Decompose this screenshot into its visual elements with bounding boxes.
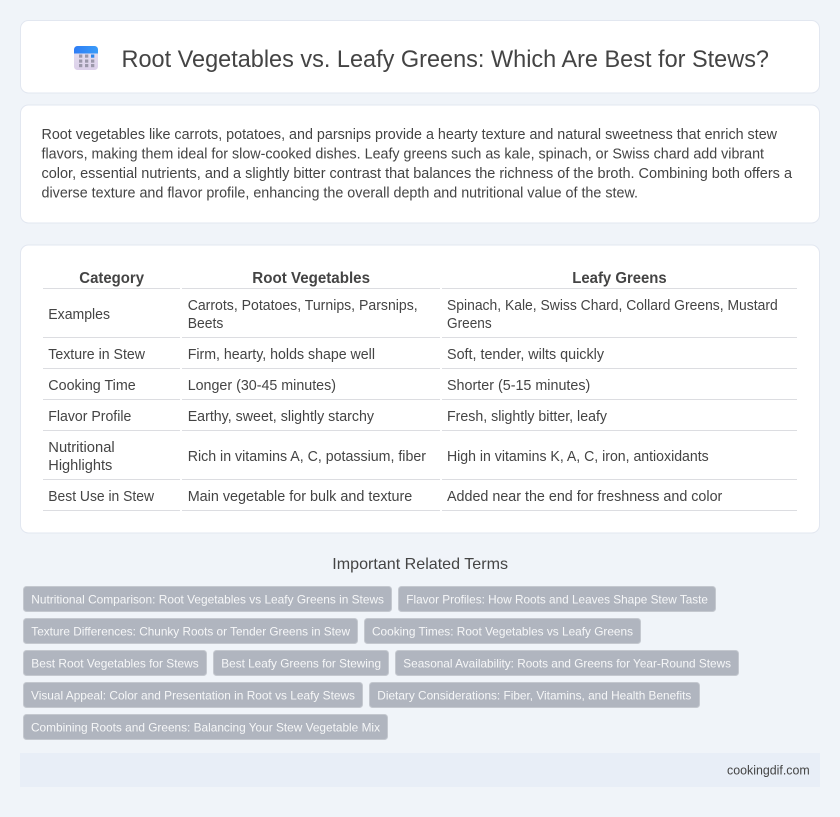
table header row: [79, 270, 667, 287]
tag: best root vegetables: Best Root Vegetables for Stews: [31, 656, 199, 670]
row: examples: Beets: [188, 316, 223, 332]
row: texture in stew: Firm, hearty, holds shape well: [188, 347, 375, 363]
tag: combining roots and greens: [24, 714, 388, 740]
row: examples: [48, 298, 778, 332]
row: flavor profile: Fresh, slightly bitter, leafy: [447, 409, 608, 425]
tag: seasonal availability: [396, 650, 738, 676]
row: flavor profile: Flavor Profile: [48, 409, 131, 425]
tag: cooking times: Cooking Times: Root Vegetables vs Leafy Greens: [372, 624, 633, 638]
tag: texture differences: Texture Differences: Chunky Roots or Tender Greens in Stew: [31, 624, 350, 638]
tag: cooking times: [364, 618, 640, 644]
row: examples: Greens: [447, 316, 492, 332]
table header row: Category: [79, 270, 144, 287]
row: examples: Carrots, Potatoes, Turnips, Parsnips,: [188, 298, 418, 314]
row: best use in stew: Best Use in Stew: [48, 489, 155, 505]
row: examples: Examples: [48, 307, 110, 323]
tag: seasonal availability: Seasonal Availability: Roots and Greens for Year-Round Stews: [403, 656, 731, 670]
row: texture in stew: Soft, tender, wilts quickly: [447, 347, 605, 363]
tag: best leafy greens: Best Leafy Greens for Stewing: [221, 656, 381, 670]
tag: best root vegetables: [24, 650, 206, 676]
row: nutritional highlights: [48, 440, 709, 474]
tag: flavor profiles: Flavor Profiles: How Roots and Leaves Shape Stew Taste: [406, 592, 708, 606]
icon: calendar: [74, 46, 98, 70]
row: cooking time: Cooking Time: [48, 378, 136, 394]
row: nutritional highlights: Highlights: [48, 458, 112, 474]
row: best use in stew: [48, 489, 722, 505]
row: flavor profile: Earthy, sweet, slightly starchy: [188, 409, 375, 425]
intro text: Root vegetables like carrots, potatoes, and parsnips provide a hearty texture and natural sweetness that enrich stew: [42, 127, 778, 143]
tag: dietary considerations: [370, 682, 700, 708]
row: examples: Spinach, Kale, Swiss Chard, Collard Greens, Mustard: [447, 298, 778, 314]
title: Root Vegetables vs. Leafy Greens: Which Are Best for Stews?: [122, 46, 769, 73]
row: texture in stew: [48, 347, 605, 363]
row: cooking time: Longer (30-45 minutes): [188, 378, 336, 394]
tag: nutritional comparison: Nutritional Comparison: Root Vegetables vs Leafy Greens in Stews: [31, 592, 384, 606]
footer source: cookingdif.com: [727, 762, 810, 777]
table header row: Root Vegetables: [252, 270, 370, 287]
heading: important related terms: Important Related Terms: [332, 556, 508, 573]
row: best use in stew: Main vegetable for bulk and texture: [188, 489, 412, 505]
row: cooking time: Shorter (5-15 minutes): [447, 378, 590, 394]
tag: flavor profiles: [398, 586, 716, 612]
intro text: flavors, making them ideal for slow-cooked dishes. Leafy greens such as kale, spinach, or Swiss chard add vibrant: [42, 146, 764, 162]
tag: best leafy greens: [214, 650, 388, 676]
row: nutritional highlights: Nutritional: [48, 440, 115, 456]
row: texture in stew: Texture in Stew: [48, 347, 146, 363]
panel: introduction: [20, 105, 820, 223]
row: best use in stew: Added near the end for freshness and color: [447, 489, 722, 505]
panel: comparison table: [20, 245, 820, 533]
panel: header: [20, 20, 820, 93]
tag: nutritional comparison: [24, 586, 392, 612]
footer: [20, 753, 820, 787]
tag: combining roots and greens: Combining Roots and Greens: Balancing Your Stew Vegetable Mix: [31, 720, 380, 734]
tag: dietary considerations: Dietary Considerations: Fiber, Vitamins, and Health Benefits: [377, 688, 691, 702]
row: nutritional highlights: Rich in vitamins A, C, potassium, fiber: [188, 449, 426, 465]
intro text: diverse texture and flavor profile, enhancing the overall depth and nutritional value of the stew.: [42, 185, 638, 201]
row: nutritional highlights: High in vitamins K, A, C, iron, antioxidants: [447, 449, 709, 465]
row: cooking time: [48, 378, 590, 394]
table header row: Leafy Greens: [572, 270, 667, 287]
tag: visual appeal: Visual Appeal: Color and Presentation in Root vs Leafy Stews: [31, 688, 355, 702]
intro text: [42, 127, 792, 201]
related term tags: [24, 586, 738, 740]
intro text: color, essential nutrients, and a slightly bitter contrast that balances the richness of the broth. Combining both offers a: [42, 166, 792, 182]
tag: visual appeal: [24, 682, 362, 708]
row: flavor profile: [48, 409, 608, 425]
tag: texture differences: [24, 618, 358, 644]
